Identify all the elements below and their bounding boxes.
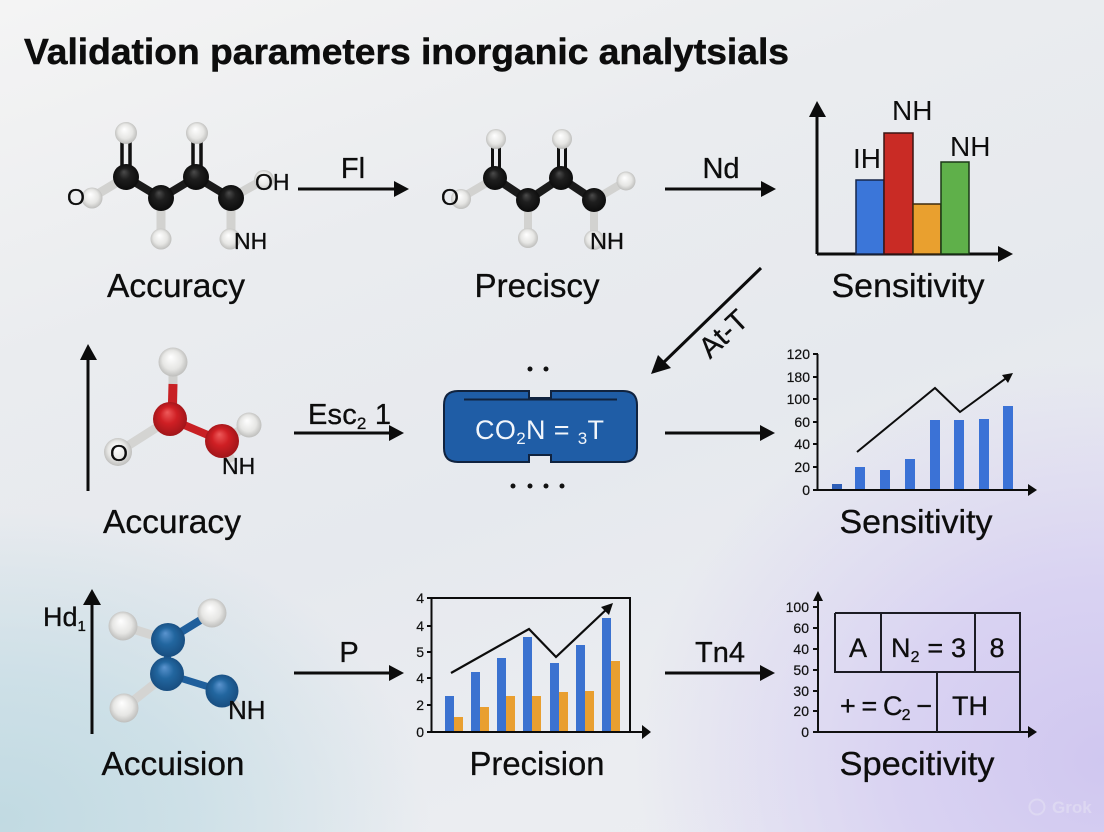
table chart: specitivity: 30 [793, 683, 809, 699]
table chart: specitivity: 60 [793, 620, 809, 636]
molecule: blue atoms [108, 598, 266, 725]
table chart: specitivity: TH [952, 691, 988, 721]
arrow: Nd: Nd [702, 153, 740, 185]
table chart: specitivity: + = C [840, 691, 902, 721]
axis arrow: row 2 left [80, 344, 97, 491]
molecule: black chain, accuracy: OH [255, 169, 290, 195]
arrow: Tn4: Tn4 [695, 637, 745, 669]
label: preciscy: Preciscy [474, 267, 600, 304]
formula box [444, 366, 637, 488]
label: sensitivity row 2: Sensitivity [840, 503, 993, 540]
axis arrow: row 3 left with Hd1 [43, 589, 101, 734]
table chart: specitivity: 8 [989, 633, 1005, 663]
bar chart: sensitivity row 2: 120 [787, 346, 810, 362]
arrow: row 2 middle [665, 425, 775, 441]
molecule: black chain, accuracy: NH [234, 228, 267, 254]
label: accuision: Accuision [102, 745, 244, 782]
label: specitivity: Specitivity [840, 745, 995, 782]
formula box: 2 [516, 429, 526, 448]
table chart: specitivity: 2 [902, 707, 911, 724]
bar chart: sensitivity top: IH [853, 143, 881, 174]
bar chart: sensitivity top: NH [892, 95, 932, 126]
table chart: specitivity: N [891, 633, 910, 663]
bar chart: precision: 2 [416, 697, 424, 713]
bar chart: sensitivity top [809, 95, 1013, 262]
table chart: specitivity: A [849, 633, 867, 663]
bar chart: precision [416, 590, 651, 740]
table chart: specitivity [786, 591, 1037, 740]
arrow: Esc2 1: 2 [357, 414, 366, 433]
table chart: specitivity: 20 [793, 703, 809, 719]
label: sensitivity row 1: Sensitivity [832, 267, 985, 304]
table chart: specitivity: − [910, 691, 932, 721]
axis arrow: row 3 left with Hd1: Hd [43, 602, 78, 632]
bar chart: precision: 0 [416, 724, 424, 740]
bar chart: sensitivity row 2: 40 [794, 436, 810, 452]
arrow: P [294, 637, 404, 681]
label: precision: Precision [470, 745, 604, 782]
arrow: Esc2 1 [294, 399, 404, 441]
table chart: specitivity: = 3 [920, 633, 966, 663]
arrow: Tn4 [665, 637, 775, 681]
bar chart: sensitivity row 2: 180 [787, 369, 810, 385]
bar chart: precision: 4 [416, 590, 424, 606]
molecule: black chain, precision [441, 129, 636, 254]
molecule: black chain, precision: O [441, 184, 459, 210]
arrow: Esc2 1: Esc [308, 399, 357, 431]
molecule: red atoms: NH [222, 453, 255, 479]
watermark: Grok: Grok [1052, 798, 1092, 817]
label: accuracy row 2: Accuracy [103, 503, 241, 540]
watermark: Grok [1030, 798, 1092, 817]
formula box: 3 [578, 429, 587, 448]
table chart: specitivity: 40 [793, 641, 809, 657]
arrow: Fl [298, 153, 409, 197]
formula box: N = [526, 415, 577, 445]
label: accuracy row 1: Accuracy [107, 267, 245, 304]
axis arrow: row 3 left with Hd1: 1 [78, 618, 86, 635]
bar chart: sensitivity row 2 [787, 346, 1037, 498]
formula box: CO [475, 415, 516, 445]
table chart: specitivity: 2 [911, 649, 920, 666]
title: Validation parameters inorganic analytsials [24, 31, 789, 72]
arrow: At-T diagonal [651, 268, 761, 374]
bar chart: precision: 4 [416, 670, 424, 686]
molecule: red atoms: O [110, 440, 128, 466]
table chart: specitivity: 100 [786, 599, 809, 615]
bar chart: precision: 5 [416, 644, 424, 660]
molecule: black chain, precision: NH [590, 228, 624, 254]
arrow: P: P [339, 637, 359, 669]
arrow: Esc2 1: 1 [367, 399, 391, 431]
arrow: Nd [665, 153, 776, 197]
bar chart: sensitivity row 2: 20 [794, 459, 810, 475]
molecule: red atoms [104, 348, 262, 479]
arrow: Fl: Fl [341, 153, 365, 185]
molecule: blue atoms: NH [228, 695, 266, 725]
bar chart: precision: 4 [416, 618, 424, 634]
table chart: specitivity: 0 [801, 724, 809, 740]
bar chart: sensitivity top: NH [950, 131, 990, 162]
bar chart: sensitivity row 2: 100 [787, 391, 810, 407]
molecule: black chain, accuracy: O [67, 184, 85, 210]
arrow: At-T diagonal: At-T [693, 304, 755, 365]
formula box: T [588, 415, 604, 445]
table chart: specitivity: 50 [793, 662, 809, 678]
bar chart: sensitivity row 2: 0 [802, 482, 810, 498]
molecule: black chain, accuracy [67, 122, 290, 254]
bar chart: sensitivity row 2: 60 [794, 414, 810, 430]
